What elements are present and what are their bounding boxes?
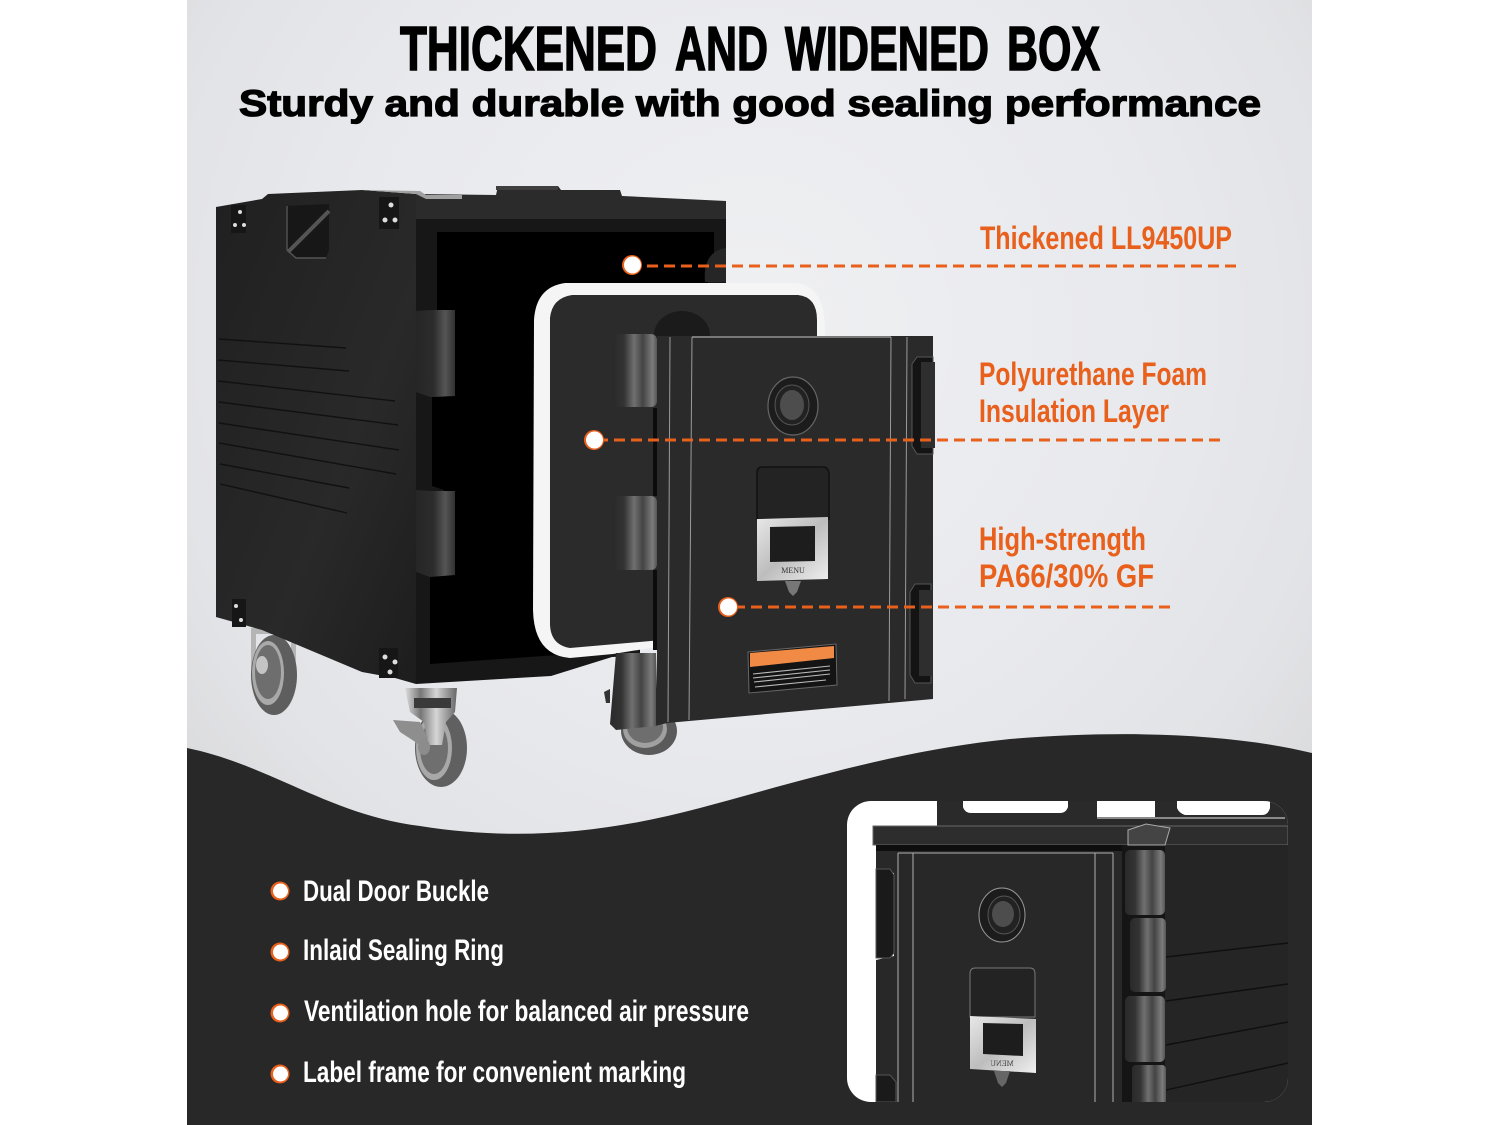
inset label frame: MENU (990, 1059, 1014, 1068)
callout: Polyurethane Foam Insulation Layer: Insulation Layer (979, 393, 1169, 429)
callout: Thickened LL9450UP: Thickened LL9450UP (980, 220, 1232, 256)
inset photo: door close-up (847, 801, 1288, 1105)
door hinges (610, 334, 657, 730)
carry handle recess (286, 204, 329, 258)
inset label recess (970, 968, 1035, 1017)
inset ventilation valve (979, 888, 1025, 942)
door edge grooves (655, 337, 907, 722)
title: WIDENED (785, 15, 989, 84)
callout: High-strength PA66/30% GF: High-strength (979, 521, 1146, 557)
product: insulated food box with open door (216, 186, 935, 787)
feature: Inlaid Sealing Ring (270, 934, 504, 967)
metal label frame: MENU (781, 566, 805, 575)
feature list (270, 875, 749, 1089)
interior recess circle (705, 248, 726, 282)
inset lid band (873, 826, 1288, 845)
feature: Ventilation hole: Ventilation hole for balanced air pressure (304, 995, 749, 1028)
callout: Thickened LL9450UP (622, 220, 1236, 275)
inset body side (1165, 845, 1288, 1102)
inset door side handles (876, 869, 896, 1102)
callout: Polyurethane Foam Insulation Layer: Polyurethane Foam (979, 356, 1207, 392)
inset label frame (970, 1016, 1036, 1073)
inset hinges (1125, 850, 1166, 1105)
box interior (430, 232, 714, 664)
box front frame (416, 219, 726, 684)
inset label pin (994, 1071, 1010, 1087)
inset body ribs (1166, 943, 1288, 1090)
inset door grooves (898, 853, 1113, 1102)
door inner panel (550, 295, 817, 648)
box top lid band (362, 186, 726, 223)
corner brackets with rivets (231, 197, 399, 678)
box side ribs (218, 339, 399, 513)
metal label frame (757, 517, 828, 581)
door outer panel (655, 336, 933, 726)
door ventilation valve (768, 377, 818, 435)
inset top handles (937, 801, 1288, 827)
door caster wheel (604, 689, 677, 755)
label frame recess (757, 467, 829, 519)
subtitle: Sturdy and durable with good sealing performance (239, 83, 1261, 124)
body hinge lower (416, 490, 455, 577)
callout: Polyurethane Foam Insulation Layer (584, 356, 1220, 450)
callout: High-strength PA66/30% GF: PA66/30% GF (979, 558, 1154, 594)
feature: Inlaid Sealing Ring: Inlaid Sealing Ring (303, 934, 504, 967)
panel: dark wave lower section (187, 734, 1312, 1125)
title (400, 15, 1100, 84)
title: THICKENED (400, 15, 657, 84)
feature: Dual Door Buckle: Dual Door Buckle (303, 875, 489, 908)
inner door vent bulge (654, 311, 710, 359)
panel: light grey background (187, 0, 1312, 1125)
front left caster wheel with brake (393, 688, 467, 787)
title: BOX (1007, 15, 1100, 84)
inset door panel (876, 851, 1125, 1102)
inset dark gap under lid (876, 845, 1122, 851)
warning sticker (748, 644, 837, 693)
inset hinge top latch (1128, 824, 1170, 845)
door white seal ring (533, 283, 825, 658)
callout: High-strength PA66/30% GF (718, 521, 1170, 617)
body hinge upper (416, 310, 455, 397)
title: AND (675, 15, 768, 84)
feature: Label frame: Label frame for convenient marking (303, 1056, 686, 1089)
box side wall (216, 190, 416, 684)
feature: Dual Door Buckle (270, 875, 489, 908)
door right recessed handles (910, 357, 935, 683)
rear left caster wheel (251, 628, 297, 715)
inset hinge backing (1122, 845, 1168, 1102)
label frame pin (785, 581, 801, 596)
